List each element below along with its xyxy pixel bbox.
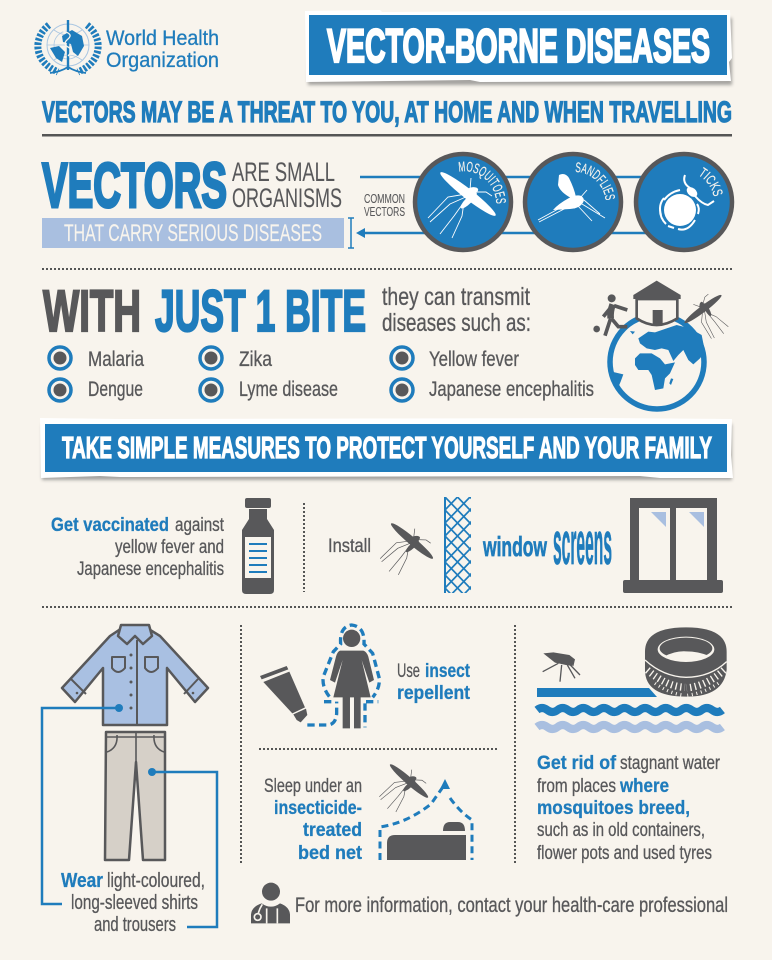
text: are small organisms: ARE SMALL bbox=[232, 157, 335, 187]
icon: mosquito bbox=[543, 652, 580, 682]
section: just 1 bite bbox=[43, 279, 736, 409]
text: wear: Wear bbox=[61, 870, 103, 892]
label: common vectors: COMMON bbox=[364, 191, 405, 206]
bullet: Lyme disease bbox=[200, 378, 338, 401]
text: use insect repellent: Use bbox=[397, 661, 420, 682]
bullet: Zika: Zika bbox=[239, 348, 272, 371]
icon: tube bbox=[260, 666, 307, 722]
text: they can transmit: diseases such as: bbox=[382, 309, 531, 337]
icon: WHO emblem bbox=[38, 20, 98, 73]
measure: stagnant water bbox=[537, 627, 727, 864]
icon: water bbox=[537, 688, 722, 729]
bullet: Dengue bbox=[49, 378, 143, 401]
text: get vaccinated: Get vaccinated bbox=[51, 515, 169, 536]
icon: trousers bbox=[105, 732, 165, 860]
text: are small organisms: ORGANISMS bbox=[232, 183, 342, 213]
connector lines with arrow bbox=[356, 177, 700, 238]
text: sleep under a net bbox=[264, 776, 363, 864]
icon: mosquitoes bbox=[412, 152, 514, 252]
text: window screens bbox=[482, 510, 612, 577]
icon: tyre bbox=[645, 627, 727, 697]
bullet: Lyme disease: Lyme disease bbox=[239, 378, 338, 401]
text: install: Install bbox=[328, 536, 371, 557]
icon: health-care professional bbox=[251, 883, 290, 923]
text: use insect repellent: repellent bbox=[397, 683, 471, 704]
measure: vaccination bbox=[51, 498, 274, 594]
icon: globe with house, person and mosquito bbox=[593, 281, 736, 409]
label: common vectors: VECTORS bbox=[364, 204, 405, 219]
icon: mosquito bbox=[380, 520, 437, 576]
icon: bed under net bbox=[380, 779, 472, 860]
icon: ticks: TICKS bbox=[700, 167, 723, 196]
measure: clothing bbox=[42, 625, 217, 936]
text: they can transmit bbox=[382, 283, 531, 337]
WHO logo bbox=[38, 20, 219, 73]
band: that carry serious diseases bbox=[42, 218, 344, 248]
text: get vaccinated: Japanese encephalitis bbox=[77, 559, 224, 580]
logo wordmark: Organization bbox=[106, 49, 219, 72]
text: wear: and trousers bbox=[94, 914, 176, 936]
text: use insect repellent bbox=[397, 661, 471, 704]
bullet: Zika bbox=[200, 347, 272, 371]
text: get rid of stagnant water: Get rid of bbox=[537, 753, 617, 774]
text: sleep under a net: insecticide- bbox=[274, 798, 362, 819]
bullet: Malaria bbox=[49, 347, 144, 371]
logo wordmark bbox=[106, 27, 219, 72]
heading: just 1 bite: JUST 1 BITE bbox=[155, 279, 366, 344]
text: get vaccinated bbox=[51, 515, 225, 580]
bullet: Dengue: Dengue bbox=[88, 378, 143, 401]
text: get rid of stagnant water: flower pots and used tyres bbox=[537, 843, 712, 864]
band: that carry serious diseases: THAT CARRY SERIOUS DISEASES bbox=[64, 220, 322, 247]
icon: window mesh bbox=[445, 497, 471, 593]
icon: mosquito bbox=[379, 761, 432, 814]
footer bbox=[251, 883, 728, 923]
text: are small organisms bbox=[232, 157, 342, 213]
text: get vaccinated: against bbox=[175, 515, 225, 536]
text: window screens: window bbox=[482, 531, 547, 562]
text: sleep under a net: treated bbox=[303, 820, 362, 841]
text: get rid of stagnant water: where bbox=[619, 776, 669, 797]
icon: sandflies bbox=[522, 152, 624, 252]
bullet: Yellow fever: Yellow fever bbox=[429, 348, 519, 371]
text: get rid of stagnant water: stagnant water bbox=[620, 753, 721, 774]
text: get rid of stagnant water: mosquitoes breed, bbox=[537, 798, 690, 819]
banner: take simple measures bbox=[40, 418, 733, 480]
icon: mosquitoes: MOSQUITOES bbox=[458, 162, 506, 204]
text: get rid of stagnant water bbox=[537, 753, 721, 864]
text: wear bbox=[61, 870, 205, 936]
icon: shirt bbox=[62, 625, 208, 725]
measure: bed net bbox=[264, 761, 472, 864]
bullet: Yellow fever bbox=[391, 347, 519, 371]
heading: vectors: VECTORS bbox=[42, 151, 227, 221]
icon: ticks bbox=[634, 152, 734, 252]
logo wordmark: World Health bbox=[106, 27, 219, 50]
icon: woman with repellent outline bbox=[307, 625, 379, 728]
callout line: trousers bbox=[152, 772, 217, 927]
text: wear: light-coloured, bbox=[107, 870, 205, 892]
measure: window screens bbox=[328, 497, 723, 593]
icon: window bbox=[623, 498, 723, 593]
bullet: Japanese encephalitis bbox=[391, 378, 594, 401]
callout dots bbox=[115, 704, 156, 776]
bullet: Japanese encephalitis: Japanese encephalitis bbox=[429, 378, 594, 401]
bracket bbox=[348, 218, 354, 248]
section: what vectors are bbox=[41, 151, 734, 252]
text: use insect repellent: insect bbox=[425, 661, 471, 682]
text: wear: long-sleeved shirts bbox=[71, 892, 198, 914]
callout line: shirt bbox=[42, 708, 119, 904]
icon: sandflies: SANDFLIES bbox=[576, 162, 615, 200]
bullet: Malaria: Malaria bbox=[88, 348, 144, 371]
text: sleep under a net: Sleep under an bbox=[264, 776, 362, 797]
label: common vectors bbox=[364, 191, 405, 219]
text: get vaccinated: yellow fever and bbox=[115, 537, 224, 558]
icon: vaccine bottle bbox=[242, 498, 274, 594]
text: get rid of stagnant water: from places bbox=[537, 776, 616, 797]
heading: with: WITH bbox=[43, 279, 141, 344]
text: they can transmit: they can transmit bbox=[382, 283, 530, 311]
text: sleep under a net: bed net bbox=[298, 843, 363, 864]
title banner bbox=[305, 10, 732, 85]
measure: repellent bbox=[260, 625, 471, 728]
text: get rid of stagnant water: such as in old containers, bbox=[537, 820, 705, 841]
